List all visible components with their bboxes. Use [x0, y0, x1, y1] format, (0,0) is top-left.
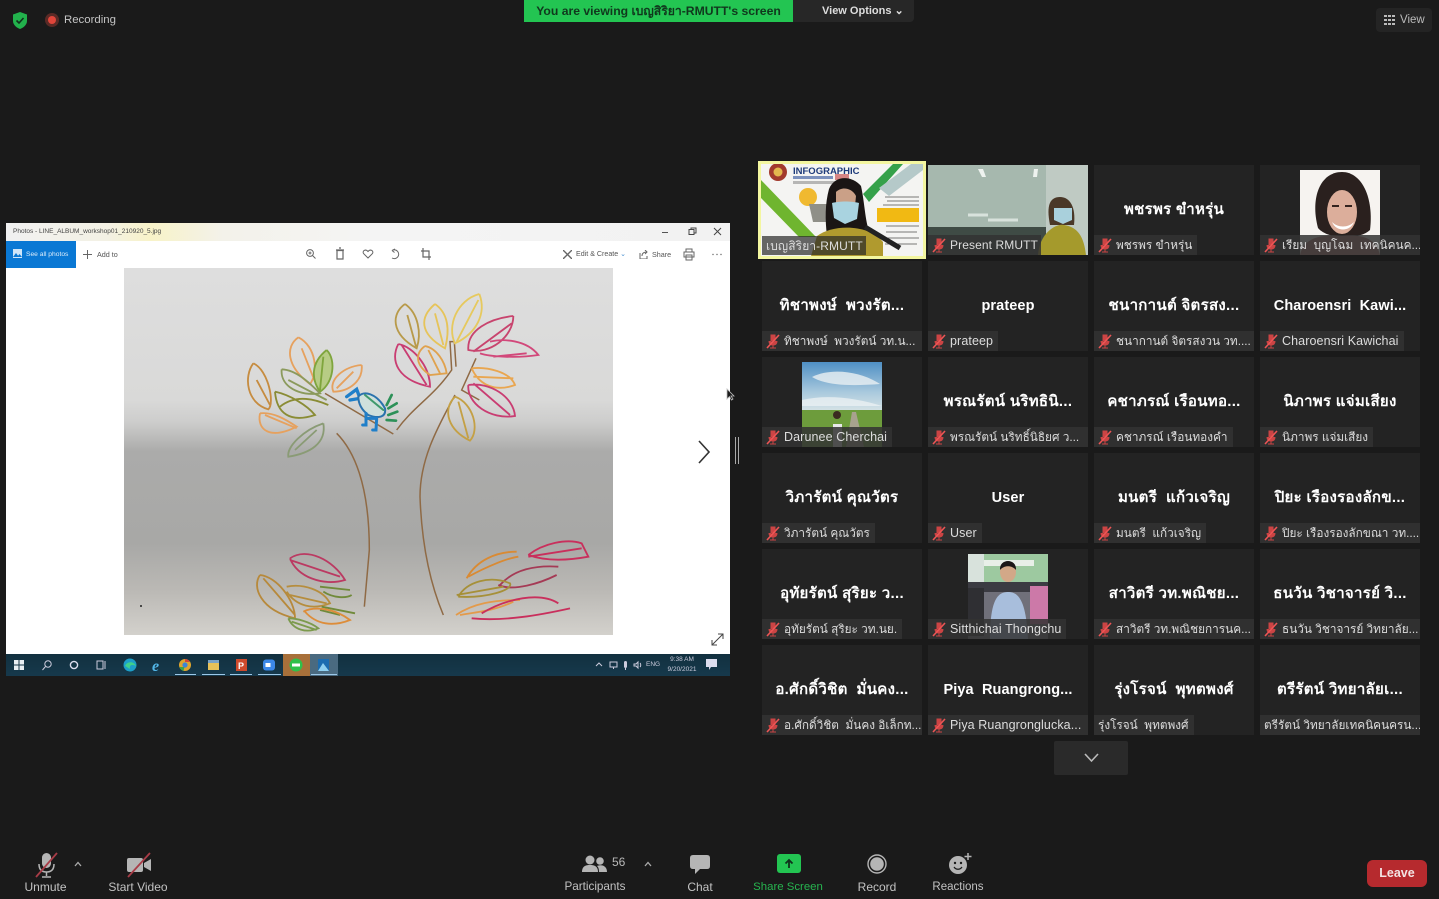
shared infographic slide video: INFOGRAPHIC	[793, 166, 860, 177]
name label: พชรพร ขำหรุ่น	[1116, 238, 1192, 252]
share screen icon	[777, 854, 801, 873]
tile: kotchaporn	[1094, 357, 1254, 447]
view layout button: View	[1400, 14, 1425, 26]
security shield icon	[13, 12, 27, 29]
bird	[347, 389, 397, 430]
chat icon	[690, 855, 710, 874]
video off icon	[127, 852, 151, 878]
trunks and branches	[325, 342, 479, 615]
chat control	[687, 855, 713, 894]
display name: prateep	[981, 298, 1035, 314]
name label	[1260, 619, 1420, 639]
shared infographic slide video	[761, 164, 923, 256]
name label	[1094, 715, 1194, 735]
tile: pornrat	[928, 357, 1088, 447]
name label: ชนากานต์ จิตรสงวน วท....	[1116, 334, 1251, 348]
clock: 9:38 AM	[670, 656, 694, 663]
clock: 9/20/2021	[668, 666, 696, 673]
tile: montri	[1094, 453, 1254, 543]
next page of participants button	[1054, 741, 1128, 775]
see all photos button	[6, 241, 76, 268]
name label	[1260, 331, 1404, 351]
name label: วิภารัตน์ คุณวัตร	[784, 526, 870, 540]
viewing banner	[524, 0, 793, 22]
tile: user	[928, 453, 1088, 543]
recording indicator: Recording	[64, 14, 116, 26]
name label: สาวิตรี วท.พณิชยการนค...	[1116, 622, 1251, 636]
display name: ปิยะ เรืองรองลักข...	[1275, 489, 1405, 506]
profile photo	[802, 362, 882, 447]
expand icon	[712, 634, 724, 646]
name label: ตรีรัตน์ วิทยาลัยเทคนิคนครน...	[1264, 718, 1420, 732]
add to button: Add to	[97, 250, 118, 259]
leave button: Leave	[1379, 866, 1415, 880]
tile: sawitree	[1094, 549, 1254, 639]
pinned apps: P	[238, 661, 244, 671]
record icon	[867, 854, 887, 874]
tile: darunee	[762, 357, 922, 447]
next photo arrow	[698, 440, 710, 464]
window title bar	[6, 223, 730, 241]
shared screen: photos window	[6, 223, 730, 676]
name label	[1094, 235, 1197, 255]
display name: Charoensri Kawi...	[1274, 298, 1406, 314]
print and more icons	[684, 248, 722, 260]
display name: มนตรี แก้วเจริญ	[1118, 489, 1230, 506]
display name: สาวิตรี วท.พณิชย...	[1109, 585, 1239, 602]
view options button	[793, 0, 914, 22]
participants label: Participants	[564, 880, 626, 893]
tile: sitthichai	[928, 549, 1088, 639]
share button	[640, 250, 671, 259]
see all photos button: See all photos	[26, 251, 68, 258]
add to button	[83, 250, 118, 259]
ground leaves right	[456, 541, 588, 619]
tile: sakdiwichit	[762, 645, 922, 735]
unmute label: Unmute	[24, 880, 67, 894]
name label	[1260, 427, 1373, 447]
start button	[14, 660, 24, 670]
display name: ธนวัน วิชาจารย์ วิ...	[1273, 585, 1407, 602]
name label	[1260, 715, 1420, 735]
start video label: Start Video	[108, 880, 168, 894]
name label: Piya Ruangronglucka...	[950, 718, 1081, 732]
name label: ธนวัน วิชาจารย์ วิทยาลัย...	[1282, 622, 1418, 636]
tile: riam	[1260, 165, 1420, 255]
panel resize handle	[735, 437, 739, 464]
name label	[1094, 619, 1254, 639]
participants icon	[582, 856, 607, 872]
tray icons	[596, 660, 642, 670]
profile photo	[968, 554, 1048, 639]
notifications	[706, 659, 717, 670]
recording indicator	[45, 13, 116, 27]
name label	[1094, 427, 1233, 447]
pinned apps: e	[152, 658, 159, 675]
leave button	[1367, 860, 1427, 887]
record control	[858, 854, 896, 894]
display name: คชาภรณ์ เรือนทอ...	[1107, 393, 1241, 410]
name label	[762, 331, 922, 351]
clock	[668, 656, 696, 673]
microphone muted icon	[35, 852, 58, 878]
display name: วิภารัตน์ คุณวัตร	[786, 489, 898, 506]
name label: เรียม บุญโฉม เทคนิคนค...	[1282, 238, 1420, 252]
name label: อุทัยรัตน์ สุริยะ วท.นย.	[784, 622, 897, 636]
window title bar: Photos - LINE_ALBUM_workshop01_210920_5.jpg	[13, 228, 161, 235]
name label	[762, 523, 875, 543]
name label: Charoensri Kawichai	[1282, 334, 1399, 348]
share screen label: Share Screen	[753, 881, 823, 893]
name label	[928, 619, 1066, 639]
name label: เบญสิริยา-RMUTT	[766, 239, 863, 253]
unmute menu caret	[74, 862, 82, 866]
display name: ทิชาพงษ์ พวงรัต...	[780, 297, 904, 314]
display name: พชรพร ขำหรุ่น	[1124, 201, 1224, 218]
participants menu caret	[644, 862, 652, 866]
tile: piya thai	[1260, 453, 1420, 543]
chat label: Chat	[687, 880, 713, 894]
language: ENG	[646, 661, 660, 668]
name label: ปิยะ เรืองรองลักขณา วท....	[1282, 526, 1419, 540]
name label	[762, 715, 922, 735]
display name: รุ่งโรจน์ พุทตพงศ์	[1114, 681, 1234, 698]
name label: คชาภรณ์ เรือนทองคำ	[1116, 430, 1228, 444]
tile: thichaphong	[762, 261, 922, 351]
name label: อ.ศักดิ์วิชิต มั่นคง อิเล็กท...	[784, 718, 921, 732]
name label: Present RMUTT	[950, 238, 1038, 252]
tile: present rmutt	[928, 165, 1088, 255]
name label: พรณรัตน์ นริทธิ์นิธิยศ ว...	[950, 430, 1079, 444]
view layout button	[1376, 8, 1432, 32]
display name: ชนากานต์ จิตรสง...	[1109, 297, 1239, 314]
tile: chanakan	[1094, 261, 1254, 351]
room video	[928, 165, 1088, 255]
profile photo	[1300, 170, 1380, 255]
name label: มนตรี แก้วเจริญ	[1116, 526, 1201, 540]
name label: Sitthichai Thongchu	[950, 622, 1061, 636]
reactions control	[932, 853, 984, 893]
mouse cursor	[726, 388, 735, 401]
search, cortana and task view icons	[42, 660, 106, 670]
display name: พรณรัตน์ นริทธินิ...	[944, 393, 1072, 410]
photo: hand drawn trees and bird	[124, 268, 613, 635]
display name: ตรีรัตน์ วิทยาลัยเ...	[1277, 681, 1403, 698]
photo toolbar icons	[306, 247, 431, 260]
name label	[1260, 523, 1420, 543]
name label: User	[950, 526, 977, 540]
share screen control	[753, 854, 823, 893]
unmute control	[24, 852, 82, 894]
tile: nipaporn	[1260, 357, 1420, 447]
name label	[762, 427, 892, 447]
name label	[928, 523, 982, 543]
tile: treerat	[1260, 645, 1420, 735]
name label: ทิชาพงษ์ พวงรัตน์ วท.น...	[784, 334, 915, 348]
name label	[762, 619, 902, 639]
reactions icon	[949, 853, 972, 874]
name label: นิภาพร แจ่มเสียง	[1282, 430, 1368, 444]
viewing banner: You are viewing เบญสิริยา-RMUTT's screen	[536, 4, 781, 18]
view options button: View Options ⌄	[822, 5, 904, 17]
edit and create menu: Edit & Create ⌄	[576, 250, 626, 258]
name label	[1260, 235, 1420, 255]
display name: User	[992, 490, 1024, 506]
system tray	[596, 656, 717, 673]
tile: prateep	[928, 261, 1088, 351]
tile: patcharaporn	[1094, 165, 1254, 255]
name label	[1094, 523, 1206, 543]
tile: thanawan	[1260, 549, 1420, 639]
name label: รุ่งโรจน์ พุทตพงศ์	[1098, 718, 1189, 732]
name label: Darunee Cherchai	[784, 430, 887, 444]
reactions label: Reactions	[932, 881, 984, 893]
window controls	[662, 228, 722, 236]
participants control	[564, 855, 652, 893]
share button: Share	[652, 250, 671, 259]
windows taskbar	[6, 654, 730, 676]
record label: Record	[858, 880, 896, 894]
display name: นิภาพร แจ่มเสียง	[1283, 393, 1397, 410]
display name: อ.ศักดิ์วิชิต มั่นคง...	[775, 681, 909, 698]
right crown leaves	[395, 294, 538, 441]
tile: charoensri	[1260, 261, 1420, 351]
name label	[928, 715, 1088, 735]
name label	[762, 236, 866, 255]
tile: piya ruangrong	[928, 645, 1088, 735]
name label	[928, 331, 998, 351]
pinned apps	[124, 654, 338, 676]
display name: Piya Ruangrong...	[943, 682, 1073, 698]
name label: prateep	[950, 334, 993, 348]
participant count: 56	[612, 855, 625, 869]
left crown leaves	[248, 337, 362, 457]
display name: อุทัยรัตน์ สุริยะ ว...	[780, 585, 904, 602]
active speaker highlight	[758, 161, 926, 259]
tile: uthairat	[762, 549, 922, 639]
start video control	[108, 852, 168, 894]
ground leaves left	[257, 554, 355, 631]
tile: rungroj	[1094, 645, 1254, 735]
tile: wiparat	[762, 453, 922, 543]
name label	[928, 427, 1088, 447]
tile: active speaker	[761, 164, 923, 256]
name label	[1094, 331, 1254, 351]
name label	[928, 235, 1041, 255]
